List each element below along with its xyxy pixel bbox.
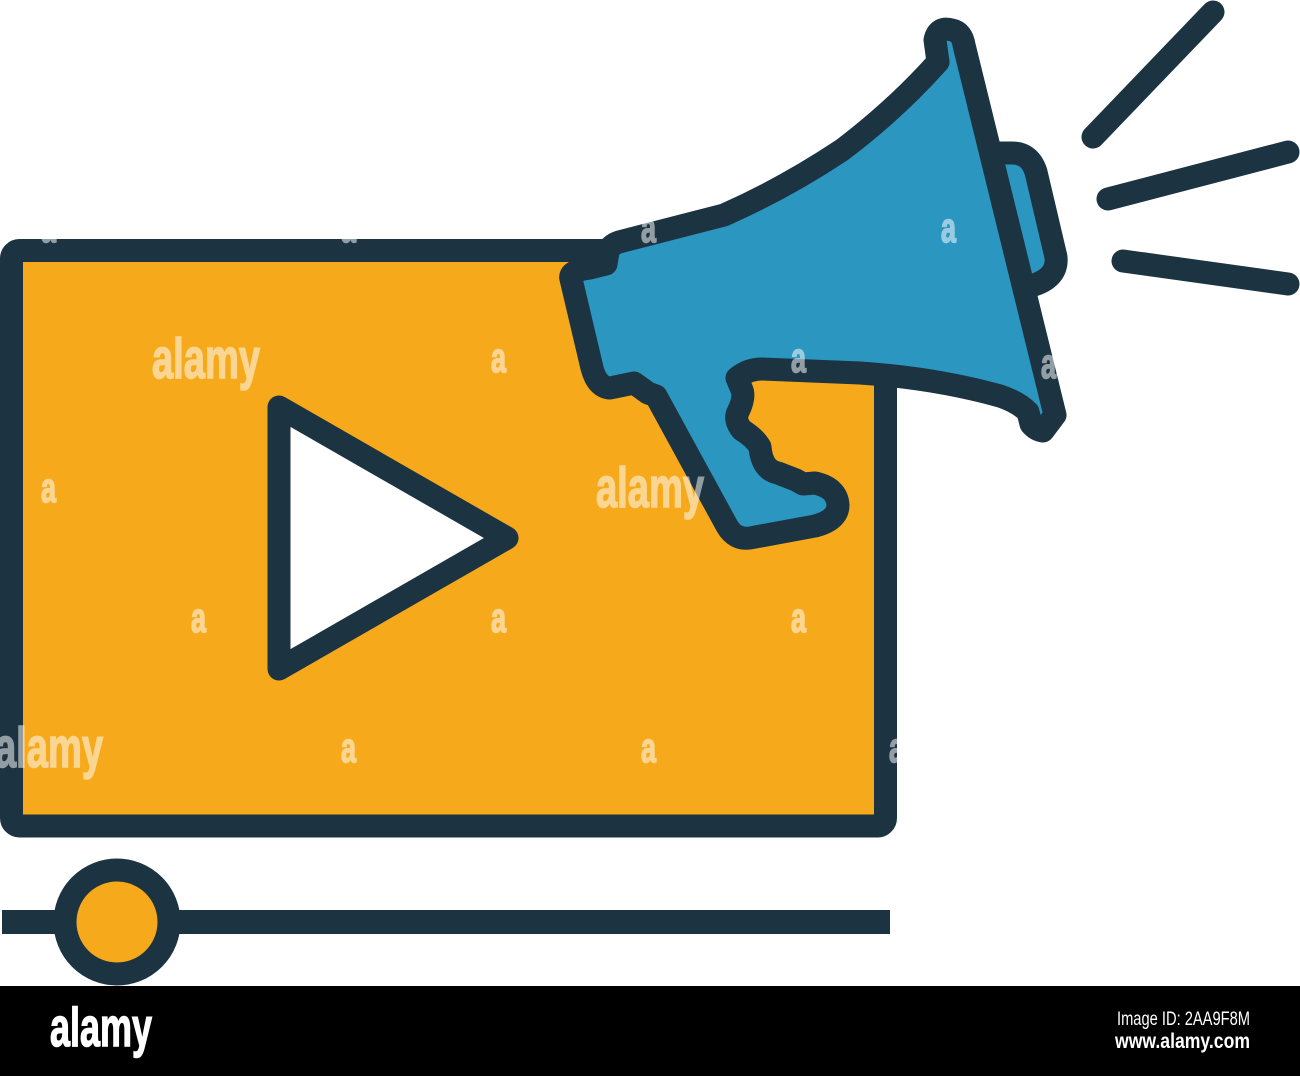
sound line bottom — [1123, 261, 1288, 284]
watermarks: a — [941, 204, 956, 251]
watermarks: a — [191, 594, 206, 641]
watermarks: alamy — [152, 327, 260, 391]
watermarks: a — [641, 724, 656, 771]
megaphone back knob — [1000, 153, 1056, 285]
website: www.alamy.com — [1114, 1030, 1250, 1053]
icon: megaphone — [571, 29, 1056, 538]
slider track — [2, 910, 890, 934]
watermarks: a — [41, 464, 56, 511]
watermarks: a — [491, 334, 506, 381]
icon: play triangle — [279, 407, 507, 669]
watermarks: a — [791, 334, 806, 381]
watermarks: a — [341, 724, 356, 771]
image id: Image ID: 2AA9F8M — [1117, 1009, 1250, 1030]
footer logo: alamy — [50, 996, 152, 1058]
megaphone body — [571, 29, 1055, 538]
sound lines — [1093, 12, 1288, 284]
watermarks: a — [889, 724, 904, 771]
watermarks: a — [491, 594, 506, 641]
watermarks — [0, 204, 1056, 780]
watermarks: a — [791, 594, 806, 641]
progress slider — [2, 870, 890, 974]
watermarks: alamy — [596, 456, 704, 520]
sound line top — [1093, 12, 1213, 137]
watermarks: a — [1041, 340, 1056, 387]
watermarks: a — [341, 204, 356, 251]
watermarks: a — [41, 204, 56, 251]
slider knob — [65, 870, 169, 974]
sound line middle — [1108, 152, 1288, 199]
watermarks: a — [641, 204, 656, 251]
footer band — [0, 986, 1300, 1076]
video player screen — [12, 250, 886, 826]
